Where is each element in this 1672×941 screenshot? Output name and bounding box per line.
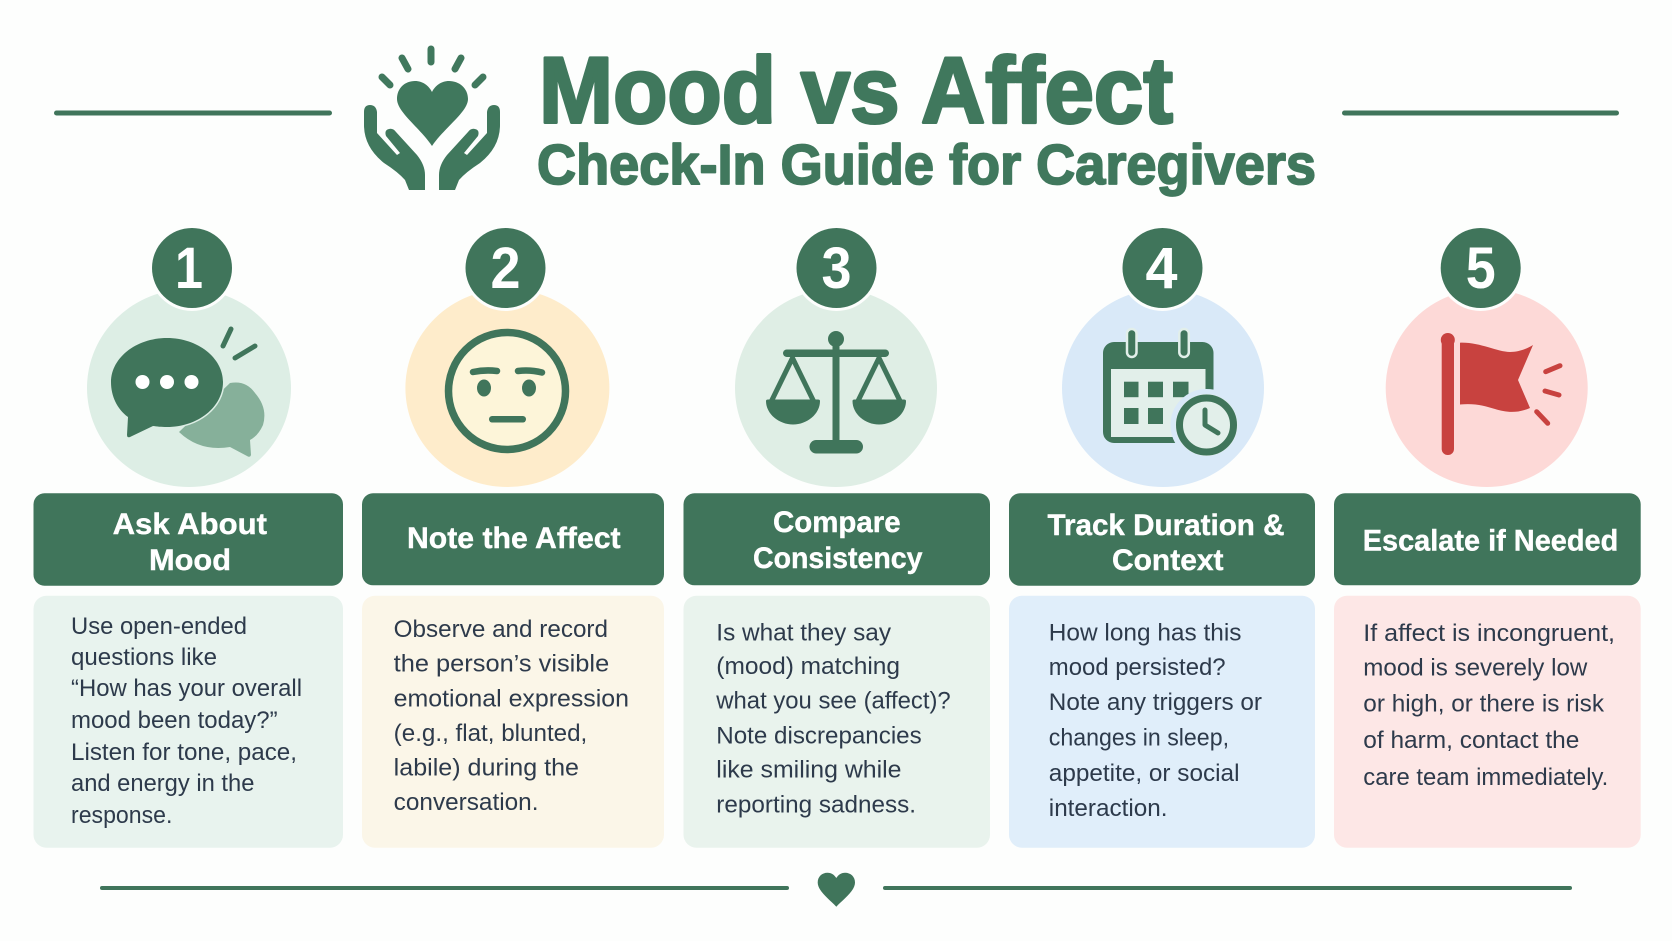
title: Mood vs Affect	[539, 38, 1173, 142]
panel: step 3 compare consistency: Compare	[773, 506, 901, 539]
icon: calendar with clock	[1103, 329, 1238, 456]
panel: step 5 escalate if needed: Escalate if Needed	[1363, 524, 1618, 558]
text card: changes in sleep,	[1049, 724, 1229, 752]
number badge 2: 2	[490, 236, 520, 301]
text card: reporting sadness.	[716, 792, 916, 818]
text card: like smiling while	[716, 756, 902, 784]
heading	[34, 493, 343, 586]
panel: step 1 ask about mood: Mood	[149, 544, 231, 577]
text card: mood is severely low	[1363, 655, 1588, 682]
text card: Note discrepancies	[716, 722, 922, 750]
text card: or high, or there is risk	[1363, 690, 1605, 718]
text card: labile) during the	[394, 754, 579, 782]
number badge 5: 5	[1466, 236, 1496, 301]
footer divider with heart	[100, 873, 1572, 907]
text card: interaction.	[1049, 795, 1168, 822]
text card: (mood) matching	[716, 653, 900, 680]
number badge 3: 3	[822, 236, 852, 301]
panel: step 2 note the affect: Note the Affect	[407, 522, 621, 555]
text card: “How has your overall	[71, 675, 302, 702]
subtitle: Check-In Guide for Caregivers	[537, 133, 1316, 197]
panel: step 1 ask about mood	[34, 225, 343, 848]
header	[54, 38, 1619, 197]
text card: Observe and record	[394, 616, 608, 643]
number badge 4	[1120, 225, 1206, 311]
number badge 3	[794, 225, 880, 311]
text card: Note any triggers or	[1049, 689, 1262, 716]
text card	[34, 596, 343, 848]
text card	[362, 596, 664, 848]
panel: step 3 compare consistency: Consistency	[753, 542, 923, 575]
text card: the person’s visible	[394, 650, 609, 678]
text card: conversation.	[394, 789, 538, 816]
heading	[1334, 493, 1641, 585]
text card: questions like	[71, 644, 217, 671]
panel: step 4 track duration and context: Track Duration &	[1048, 509, 1284, 542]
icon: balance scale	[766, 331, 906, 454]
panel: step 1 ask about mood: Ask About	[113, 508, 267, 541]
text card: If affect is incongruent,	[1363, 620, 1615, 647]
text card: How long has this	[1049, 620, 1242, 646]
panel: step 4 track duration and context: Context	[1112, 544, 1224, 577]
text card	[1009, 596, 1315, 848]
number badge 1	[149, 225, 235, 311]
text card: Listen for tone, pace,	[71, 739, 297, 766]
icon: neutral face	[448, 332, 566, 450]
text card: (e.g., flat, blunted,	[394, 720, 587, 747]
panel: step 3 compare consistency	[684, 225, 990, 848]
heading	[362, 493, 664, 585]
heading	[684, 493, 990, 585]
text card: mood persisted?	[1049, 654, 1226, 681]
panel: step 2 note the affect	[362, 225, 664, 848]
panel: step 5 escalate if needed	[1334, 225, 1641, 848]
number badge 2	[462, 225, 548, 311]
text card: of harm, contact the	[1363, 727, 1579, 754]
text card: response.	[71, 802, 172, 829]
text card: and energy in the	[71, 770, 254, 797]
number badge 4: 4	[1146, 236, 1178, 301]
number badge 5	[1438, 225, 1524, 311]
text card: emotional expression	[394, 686, 629, 712]
text card	[684, 596, 990, 848]
icon: red flag	[1441, 333, 1560, 455]
icon: hands holding heart	[364, 49, 500, 190]
text card: Is what they say	[716, 620, 891, 646]
text card: appetite, or social	[1049, 760, 1240, 787]
panel: step 4 track duration and context	[1009, 225, 1315, 848]
icon: speech bubbles	[111, 329, 264, 457]
text card: Use open-ended	[71, 613, 247, 640]
text card	[1334, 596, 1641, 848]
text card: care team immediately.	[1363, 764, 1608, 791]
text card: what you see (affect)?	[715, 688, 951, 714]
number badge 1: 1	[175, 236, 203, 301]
heading	[1009, 493, 1315, 586]
text card: mood been today?”	[71, 707, 278, 734]
